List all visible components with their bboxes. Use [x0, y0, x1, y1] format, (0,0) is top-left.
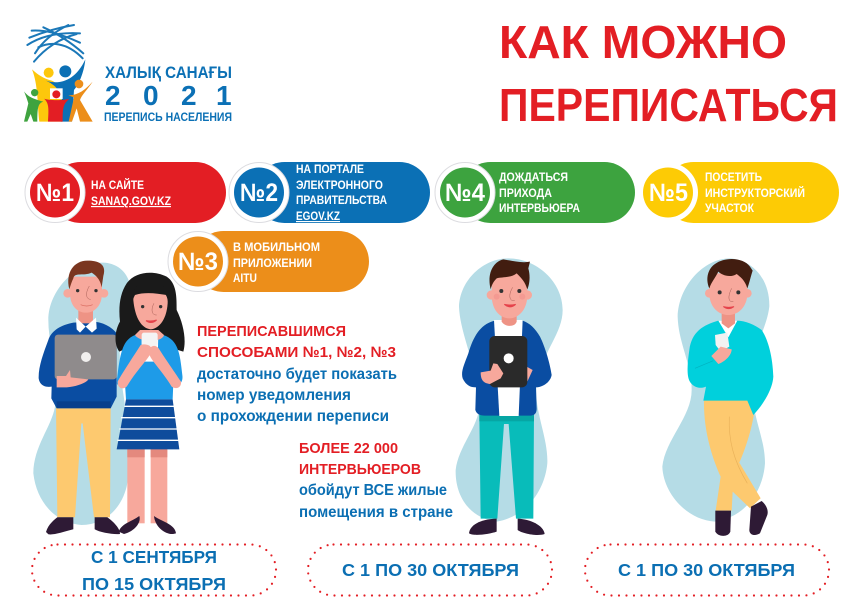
text block: interviewers: [299, 440, 453, 521]
text block: interviewers: помещения в стране: [299, 504, 453, 521]
text block: interviewers: ИНТЕРВЬЮЕРОВ: [299, 461, 421, 478]
logo text: year: 0: [143, 80, 159, 111]
panel: method 2: EGOV.KZ: [296, 211, 340, 223]
text block: interviewers: БОЛЕЕ 22 000: [299, 440, 398, 457]
panel: method 4: [435, 162, 635, 223]
title: [499, 16, 838, 131]
panel: method 5: ПОСЕТИТЬ: [705, 172, 762, 184]
panel: method 3: ПРИЛОЖЕНИИ: [233, 258, 312, 270]
panel: method 2: №2: [240, 179, 278, 207]
logo text: subtitle: ПЕРЕПИСЬ НАСЕЛЕНИЯ: [104, 110, 232, 124]
panel: method 2: [229, 162, 430, 223]
logo text: year: 2: [105, 80, 121, 111]
panel: method 2: ЭЛЕКТРОННОГО: [296, 180, 383, 192]
date label: 1 September to 15 October: ПО 15 ОКТЯБРЯ: [82, 574, 226, 594]
illustration: man with laptop and woman with phone: [33, 261, 185, 534]
illustration: man with tablet: [456, 258, 563, 535]
panel: method 4: ПРИХОДА: [499, 188, 552, 200]
text block: those who registered by methods 1-3: [197, 323, 397, 425]
date label: 1 to 30 October, method 4: [308, 544, 552, 596]
text block: those who registered by methods 1-3: СПОСОБАМИ №1, №2, №3: [197, 344, 396, 361]
logo: Halyq Sanagy 2021: [24, 25, 232, 124]
date label: 1 September to 15 October: С 1 СЕНТЯБРЯ: [91, 547, 217, 567]
icon: blue census arcs and family: [24, 25, 93, 122]
panel: method 1: [25, 162, 226, 223]
panel: method 5: УЧАСТОК: [705, 203, 755, 215]
panel: method 5: ИНСТРУКТОРСКИЙ: [705, 187, 805, 200]
panel: method 5: №5: [649, 179, 688, 207]
panel: method 2: ПРАВИТЕЛЬСТВА: [296, 195, 387, 207]
panel: method 3: AITU: [233, 273, 257, 285]
title: КАК МОЖНО: [499, 16, 787, 68]
panel: method 5: [638, 162, 839, 223]
panel: method 1: №1: [36, 179, 74, 207]
text block: those who registered by methods 1-3: достаточно будет показать: [197, 366, 397, 383]
date label: 1 to 30 October, method 5: [585, 544, 829, 596]
illustration: man with phone: [662, 258, 773, 536]
panel: method 1: SANAQ.GOV.KZ: [91, 196, 171, 208]
date label: 1 September to 15 October: [32, 544, 276, 596]
panel: method 1: НА САЙТЕ: [91, 179, 144, 192]
panel: method 3: [168, 231, 369, 292]
panel: method 2: НА ПОРТАЛЕ: [296, 164, 364, 176]
text block: those who registered by methods 1-3: о прохождении переписи: [197, 408, 389, 425]
text block: interviewers: обойдут ВСЕ жилые: [299, 482, 447, 499]
date label: 1 to 30 October, method 4: С 1 ПО 30 ОКТЯБРЯ: [342, 560, 519, 580]
panel: method 3: №3: [178, 248, 218, 276]
panel: method 4: №4: [445, 179, 485, 207]
text block: those who registered by methods 1-3: ПЕРЕПИСАВШИМСЯ: [197, 323, 346, 340]
panel: method 4: ИНТЕРВЬЮЕРА: [499, 203, 580, 215]
logo text: name: ХАЛЫҚ САНАҒЫ: [105, 64, 232, 82]
panel: method 3: В МОБИЛЬНОМ: [233, 242, 320, 254]
logo text: year: 1: [216, 80, 232, 111]
date label: 1 to 30 October, method 5: С 1 ПО 30 ОКТЯБРЯ: [618, 560, 795, 580]
man: [39, 261, 120, 534]
panel: method 4: ДОЖДАТЬСЯ: [499, 172, 568, 184]
text block: those who registered by methods 1-3: номер уведомления: [197, 387, 351, 404]
logo text: year: 2: [181, 80, 197, 111]
logo text: year: [105, 80, 232, 111]
woman: [115, 273, 185, 534]
